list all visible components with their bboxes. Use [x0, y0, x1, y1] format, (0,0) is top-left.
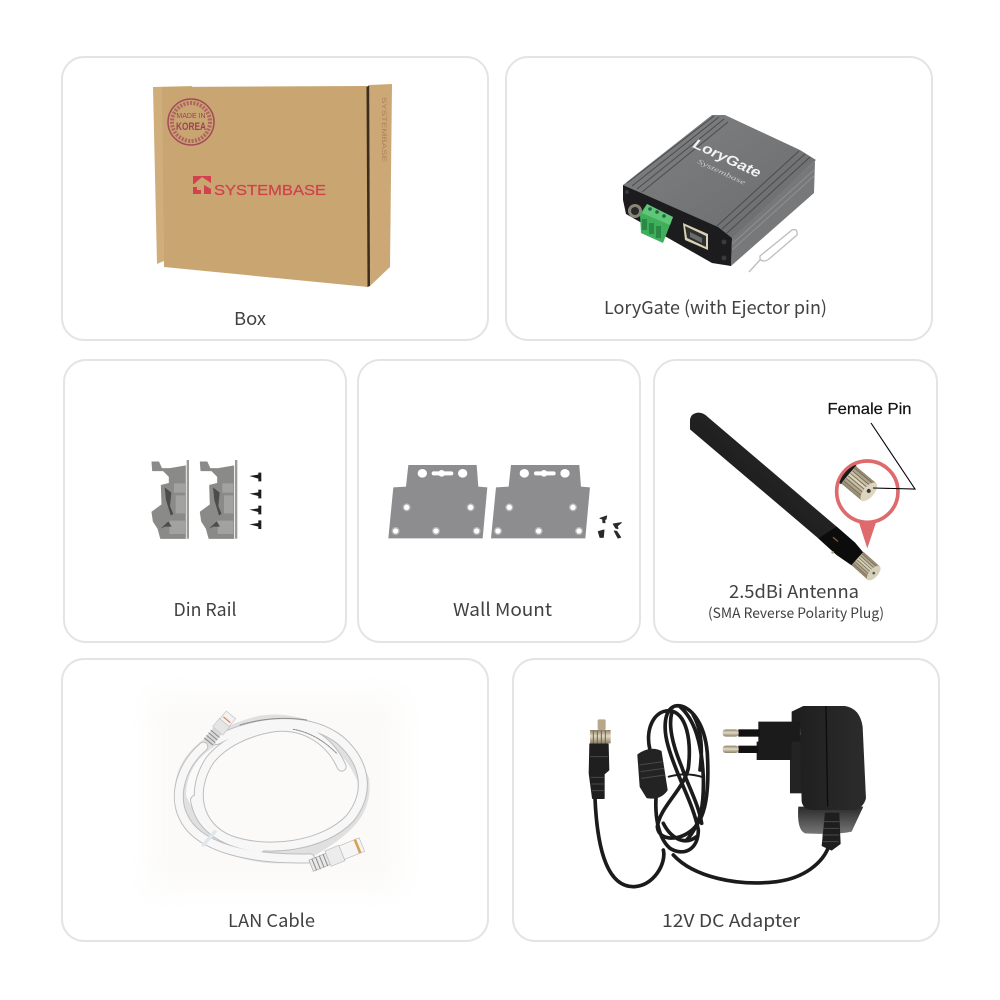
icon: LoryGate device — [623, 115, 816, 272]
label: LAN cable: LAN Cable — [228, 907, 315, 933]
icon: wall mount plates — [388, 465, 621, 538]
icon: antenna — [690, 413, 898, 583]
annotation: female pin: Female Pin — [828, 401, 912, 418]
icon: LAN cable — [179, 711, 365, 873]
connector: top — [203, 711, 236, 747]
connector: bottom — [308, 837, 365, 873]
panel: DC adapter — [513, 659, 939, 941]
logo: Systembase: SYSTEMBASE — [214, 182, 326, 199]
icon: cardboard box: SYSTEMBASE — [380, 97, 386, 162]
adapter cords — [595, 706, 829, 887]
label: DC adapter: 12V DC Adapter — [662, 907, 801, 933]
pointer line — [871, 423, 915, 489]
stamp: made in Korea: KOREA — [176, 121, 206, 133]
icon: cardboard box — [153, 84, 392, 287]
DC plug — [589, 719, 611, 798]
label: antenna: 2.5dBi Antenna — [729, 578, 859, 604]
panel: box — [62, 57, 488, 340]
wall adapter body — [723, 706, 866, 851]
panel: din rail — [64, 360, 346, 642]
screws — [249, 473, 261, 529]
stamp: made in Korea: MADE IN — [176, 113, 206, 120]
panel: LoryGate — [506, 57, 932, 340]
icon: din rail clips — [152, 460, 261, 539]
panel: wall mount — [358, 360, 640, 642]
stamp: made in Korea — [168, 99, 214, 145]
icon: LoryGate device: Systembase — [696, 158, 747, 187]
logo: Systembase — [193, 176, 326, 199]
label: din rail: Din Rail — [174, 596, 236, 622]
label: LoryGate: LoryGate (with Ejector pin) — [604, 294, 827, 320]
panel: LAN cable — [62, 659, 488, 941]
antenna connector — [851, 552, 883, 583]
sublabel: SMA plug: (SMA Reverse Polarity Plug) — [708, 603, 884, 623]
label: box: Box — [234, 305, 266, 331]
icon: LoryGate device: LoryGate — [691, 135, 764, 181]
RJ45 port — [683, 223, 708, 250]
panel: antenna — [654, 360, 937, 642]
ejector pin — [749, 230, 797, 272]
ferrite bead — [638, 750, 667, 798]
label: wall mount: Wall Mount — [453, 596, 552, 622]
callout: magnified pin — [836, 461, 898, 548]
icon: 12V DC adapter — [589, 706, 866, 887]
screws — [598, 516, 621, 538]
green terminal block — [640, 204, 673, 243]
